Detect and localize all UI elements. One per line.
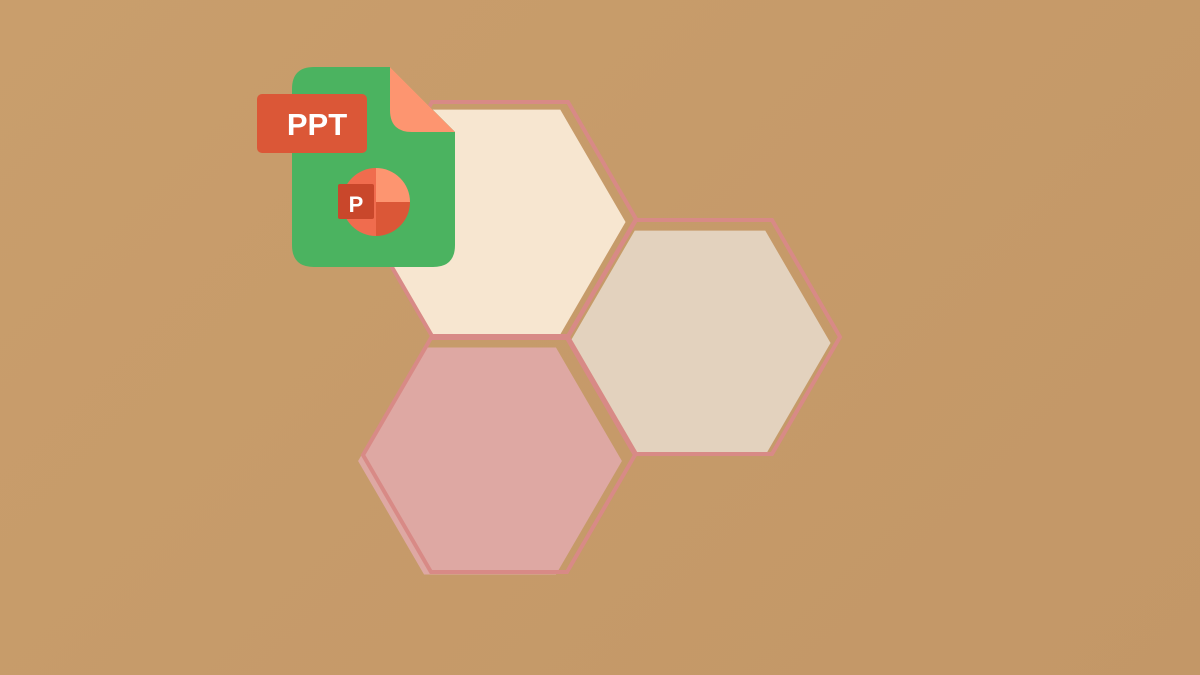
hexagon: top bbox=[364, 102, 636, 336]
icon: PPT file: P bbox=[349, 192, 363, 217]
hexagon: right bbox=[568, 220, 840, 455]
icon: PPT file bbox=[257, 67, 455, 267]
hexagon: bottom bbox=[358, 338, 635, 574]
icon: PPT file: PPT bbox=[287, 107, 347, 142]
